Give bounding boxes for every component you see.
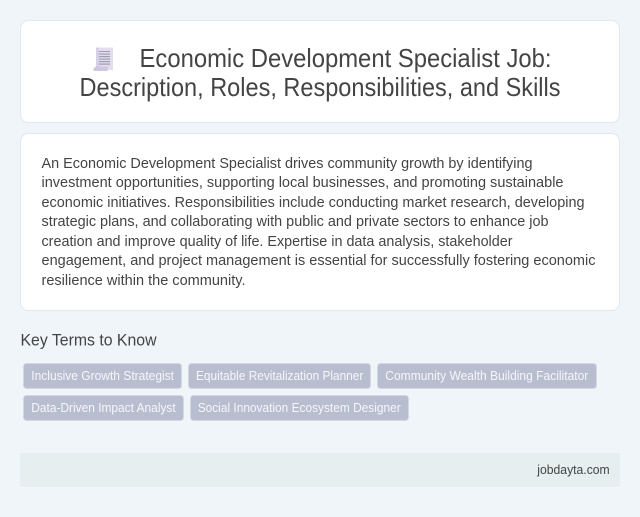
tag: Social Innovation Ecosystem Designer [190, 396, 408, 420]
panel: title card [20, 20, 620, 122]
footer bar: jobdayta.com [536, 463, 610, 477]
tag: Community Wealth Building Facilitator: Community Wealth Building Facilitator [385, 369, 588, 383]
description text: strategic plans, and collaborating with public and private sectors to enhance job [42, 214, 548, 230]
title: Description, Roles, Responsibilities, and Skills [80, 72, 560, 102]
description text: creation and improve quality of life. Expertise in data analysis, stakeholder [42, 234, 513, 250]
title: Economic Development Specialist Job: [140, 43, 552, 73]
heading: key terms: Key Terms to Know [20, 332, 157, 350]
tag: Social Innovation Ecosystem Designer: Social Innovation Ecosystem Designer [198, 401, 401, 415]
tag: Data-Driven Impact Analyst [24, 396, 184, 420]
footer bar [20, 453, 620, 487]
description text: economic initiatives. Responsibilities include conducting market research, developing [42, 195, 584, 211]
description text [42, 156, 596, 289]
panel: description [20, 134, 620, 310]
description text: An Economic Development Specialist drives community growth by identifying [42, 156, 532, 172]
description text: engagement, and project management is essential for successfully fostering economic [42, 253, 596, 269]
description text: resilience within the community. [42, 273, 246, 289]
tag: Community Wealth Building Facilitator [378, 364, 596, 388]
tag: Equitable Revitalization Planner: Equitable Revitalization Planner [196, 369, 363, 383]
tag: Inclusive Growth Strategist: Inclusive Growth Strategist [31, 369, 175, 383]
tag: Data-Driven Impact Analyst: Data-Driven Impact Analyst [31, 401, 176, 415]
title [80, 43, 560, 102]
tag: Inclusive Growth Strategist [24, 364, 182, 388]
description text: investment opportunities, supporting local businesses, and promoting sustainable [42, 175, 564, 191]
tag: Equitable Revitalization Planner [188, 364, 370, 388]
icon: document scroll [94, 48, 113, 71]
